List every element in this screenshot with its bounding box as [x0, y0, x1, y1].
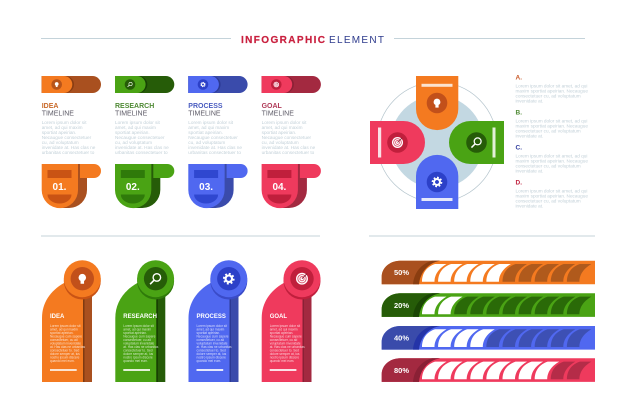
legend: D: [516, 180, 588, 208]
text block: process: invenidate at. Has clas ne: [188, 145, 242, 150]
legend: B: maxim sportiat apeirian. Necaugue: [516, 124, 588, 128]
card: goal: dolore semper at, ius: [270, 352, 300, 356]
legend: A: consectetuer cu, ad voluptatum: [516, 94, 581, 98]
text block: idea: urbanitas consectetuer to: [42, 150, 95, 155]
card: process: quando mei eum.: [196, 359, 221, 363]
card: goal: at. Has clas ne urbanitas: [270, 345, 305, 349]
text block: idea: amet, ad qui maxim: [42, 125, 83, 130]
card: goal: nostro ipsum discere: [270, 356, 299, 360]
title: ELEMENT: [329, 35, 384, 46]
text block: goal: amet, ad qui maxim: [262, 125, 303, 130]
card: goal: [262, 260, 320, 382]
pill header: idea: [42, 76, 101, 93]
number badge: 01: 01.: [53, 182, 67, 193]
heading: goal timeline: TIMELINE: [262, 110, 294, 118]
timeline column: research: [115, 76, 174, 208]
pill header: goal: [262, 76, 321, 93]
card: research: sportiat apeirian.: [123, 331, 147, 335]
heading: goal timeline: GOAL: [262, 103, 283, 110]
card: idea: sportiat apeirian.: [50, 331, 74, 335]
card: idea: Lorem ipsum dolor sit: [50, 324, 81, 328]
card: process: voluptatum invenidate: [196, 342, 228, 346]
card: research: RESEARCH: [123, 314, 157, 320]
tab: red target: [370, 121, 425, 164]
progress bar: 20%: 20%: [394, 301, 409, 310]
heading: idea timeline: IDEA: [42, 103, 58, 110]
title: INFOGRAPHIC: [241, 35, 325, 46]
pill header: research: [115, 76, 174, 93]
heading: idea timeline: TIMELINE: [42, 110, 74, 118]
card: goal: voluptatum invenidate: [270, 342, 301, 346]
card: process: consectetuer, cu ad: [196, 338, 224, 342]
legend: B: invenidate at.: [516, 134, 543, 138]
legend: D: maxim sportiat apeirian. Necaugue: [516, 194, 588, 198]
text block: idea: cu, ad voluptatum: [42, 140, 79, 145]
card: process: PROCESS: [196, 314, 226, 320]
card: research: at. Has clas ne urbanitas: [123, 345, 159, 349]
number badge: 03: 03.: [199, 182, 213, 193]
text block: research: invenidate at. Has clas ne: [115, 145, 169, 150]
pill header: process: [188, 76, 248, 93]
legend: C: maxim sportiat apeirian. Necaugue: [516, 158, 588, 164]
text block: goal: Necaugue consectetuer: [262, 135, 312, 140]
number badge: 04: 04.: [272, 182, 287, 193]
number badge: 02: 02.: [126, 182, 140, 193]
progress bar: 50%: [382, 261, 595, 284]
legend: A: maxim sportiat apeirian. Necaugue: [516, 88, 588, 94]
card: idea: consectetuer, cu ad: [50, 338, 78, 342]
card: goal: amet, ad qui maxim: [270, 328, 298, 332]
heading: goal timeline: [262, 103, 294, 118]
legend: D: Lorem ipsum dolor sit amet, ad qui: [516, 188, 587, 194]
card: goal: Lorem ipsum dolor sit: [270, 324, 300, 328]
panel: tall cards: [42, 260, 320, 382]
card: process: dolore semper at, ius: [196, 352, 227, 356]
card: process: [188, 260, 247, 382]
legend: C: invenidate at.: [516, 168, 543, 174]
legend: C: [516, 144, 588, 174]
progress bar: 80%: 80%: [394, 366, 409, 375]
circle backdrop: [377, 82, 497, 202]
card: process: sportiat apeirian.: [196, 331, 220, 335]
progress bar: 20%: [382, 293, 595, 317]
card: idea: nostro ipsum discere: [50, 356, 80, 360]
card: research: dolore semper at, ius: [123, 352, 153, 356]
card: research: consectetuer, cu ad: [123, 338, 151, 342]
text block: idea: Lorem ipsum dolor sit: [42, 120, 87, 125]
timeline column: goal: [262, 76, 321, 208]
tab: blue gear: [416, 155, 458, 209]
text block: research: sportiat apeirian.: [115, 130, 150, 135]
heading: process timeline: TIMELINE: [188, 110, 221, 118]
heading: process timeline: PROCESS: [188, 103, 223, 110]
heading: research timeline: TIMELINE: [115, 110, 148, 118]
heading: research timeline: RESEARCH: [115, 103, 154, 110]
text block: research: cu, ad voluptatum: [115, 140, 152, 145]
card: research: Lorem ipsum dolor sit: [123, 324, 154, 328]
text block: idea: Necaugue consectetuer: [42, 135, 92, 140]
card: idea: Necaugue cum sapere: [50, 334, 82, 338]
text block: process: Necaugue consectetuer: [188, 135, 238, 140]
text block: idea: sportiat apeirian.: [42, 130, 76, 135]
card: idea: amet, ad qui maxim: [50, 328, 78, 332]
card: process: amet, ad qui maxim: [196, 328, 225, 332]
heading: idea timeline: [42, 103, 74, 118]
card: goal: GOAL: [270, 314, 287, 320]
timeline column: idea: [42, 76, 101, 208]
text block: research: Necaugue consectetuer: [115, 135, 165, 140]
text block: process: amet, ad qui maxim: [188, 125, 229, 130]
text block: research: amet, ad qui maxim: [115, 125, 156, 130]
progress bar: 80%: [382, 358, 595, 382]
card: research: nostro ipsum discere: [123, 356, 153, 360]
card: process: Necaugue cum sapere: [196, 334, 229, 338]
card: goal: Necaugue cum sapere: [270, 334, 302, 338]
card: idea: quando mei eum.: [50, 359, 75, 363]
card: research: amet, ad qui maxim: [123, 328, 151, 332]
timeline column: process: [188, 76, 248, 208]
text block: process: sportiat apeirian.: [188, 130, 223, 135]
card: goal: consectetuer, cu ad: [270, 338, 298, 342]
legend: A: Lorem ipsum dolor sit amet, ad qui: [516, 84, 587, 88]
card: idea: consectetuer to. Sed: [50, 348, 79, 352]
text block: research: urbanitas consectetuer to: [115, 150, 168, 155]
text block: process: cu, ad voluptatum: [188, 140, 225, 145]
card: process: at. Has clas ne urbanitas: [196, 345, 232, 349]
text block: goal: invenidate at. Has clas ne: [262, 145, 316, 150]
panel: progress bars: [382, 261, 595, 382]
panel: timeline columns: [42, 76, 321, 208]
card: process: Lorem ipsum dolor sit: [196, 324, 227, 328]
progress bar: 40%: 40%: [394, 334, 409, 342]
text block: idea: invenidate at. Has clas ne: [42, 145, 96, 150]
card: process: consectetuer to. Sed: [196, 348, 226, 352]
heading: process timeline: [188, 103, 223, 118]
heading: research timeline: [115, 103, 154, 118]
legend: B: consectetuer cu, ad voluptatum: [516, 128, 581, 134]
text block: goal: cu, ad voluptatum: [262, 140, 299, 145]
legend: B: Lorem ipsum dolor sit amet, ad qui: [516, 118, 587, 124]
legend: A: invenidate at.: [516, 98, 543, 104]
text block: goal: sportiat apeirian.: [262, 130, 296, 135]
text block: research: Lorem ipsum dolor sit: [115, 120, 161, 125]
legend: C: Lorem ipsum dolor sit amet, ad qui: [516, 154, 587, 158]
panel: circular diagram: [370, 74, 588, 209]
text block: goal: urbanitas consectetuer to: [262, 150, 315, 155]
legend: C: C.: [516, 144, 522, 152]
progress bar: 40%: [382, 326, 595, 350]
legend: D: D.: [516, 180, 522, 186]
card: idea: IDEA: [50, 314, 65, 320]
title: [41, 35, 585, 46]
card: goal: quando mei eum.: [270, 359, 294, 363]
card: idea: at. Has clas ne urbanitas: [50, 345, 85, 349]
legend: A: [516, 74, 588, 104]
text block: process: Lorem ipsum dolor sit: [188, 120, 234, 125]
legend: D: consectetuer cu, ad voluptatum: [516, 198, 581, 204]
card: research: consectetuer to. Sed: [123, 348, 153, 352]
card: idea: [42, 260, 101, 382]
card: research: quando mei eum.: [123, 359, 148, 363]
progress bar: 50%: 50%: [394, 268, 409, 277]
card: idea: dolore semper at, ius: [50, 352, 80, 356]
legend: B: [516, 110, 588, 138]
legend: C: consectetuer cu, ad voluptatum: [516, 164, 581, 168]
card: research: Necaugue cum sapere: [123, 334, 156, 338]
tab: orange bulb: [416, 76, 458, 130]
card: goal: consectetuer to. Sed: [270, 348, 299, 352]
legend: A: A.: [516, 74, 522, 82]
text block: goal: Lorem ipsum dolor sit: [262, 120, 307, 125]
card: idea: voluptatum invenidate: [50, 342, 81, 346]
tab: green magnifier: [449, 121, 504, 164]
legend: B: B.: [516, 110, 522, 116]
card: process: nostro ipsum discere: [196, 356, 226, 360]
text block: process: urbanitas consectetuer to: [188, 150, 241, 155]
legend: D: invenidate at.: [516, 204, 543, 208]
card: research: [115, 260, 174, 382]
card: research: voluptatum invenidate: [123, 342, 155, 346]
card: goal: sportiat apeirian.: [270, 331, 293, 335]
